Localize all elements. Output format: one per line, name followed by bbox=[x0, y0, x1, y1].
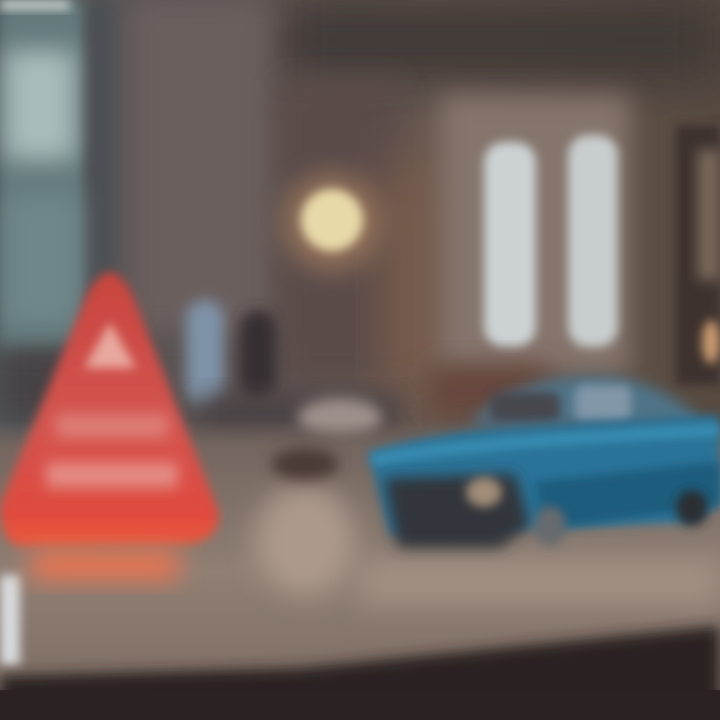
tabletop bbox=[0, 420, 720, 695]
background figures bbox=[186, 300, 550, 438]
right window bbox=[440, 95, 630, 375]
triangle base glow bbox=[30, 550, 180, 580]
triangle highlight bbox=[84, 322, 136, 368]
triangle text band bbox=[56, 414, 168, 438]
lamp glow bbox=[282, 172, 382, 272]
warning triangle bbox=[0, 272, 218, 580]
blue car bbox=[368, 376, 720, 548]
left window bbox=[0, 0, 120, 420]
wall frame right bbox=[676, 125, 720, 385]
front edge of table bbox=[0, 626, 720, 720]
